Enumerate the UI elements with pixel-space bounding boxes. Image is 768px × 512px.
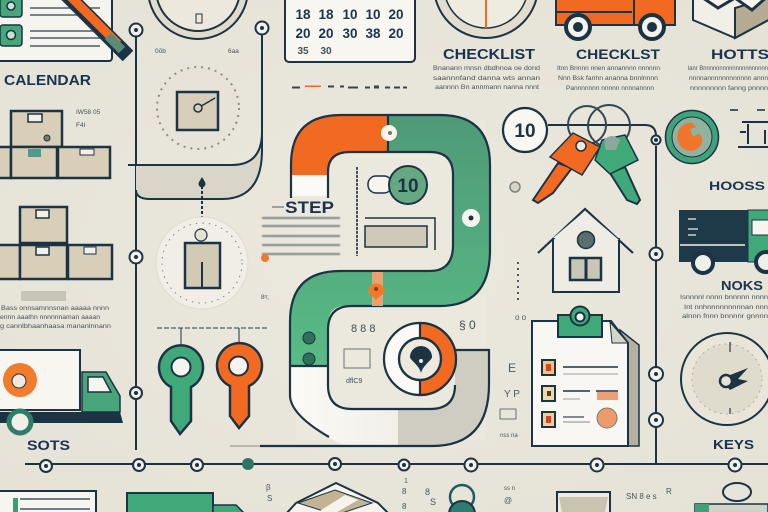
bottom row: small truck and ring [695, 483, 768, 512]
badge 10 by keys: 10 [514, 121, 536, 142]
orange key [533, 133, 600, 203]
path outlines [260, 115, 490, 446]
icon: stacked boxes lower [0, 207, 112, 279]
text: boxes description: ennn aaathn nnnnnnaman aaaan [0, 314, 101, 321]
panel: calendar: 10 [342, 7, 358, 22]
left text column beside clipboard: Y P [504, 389, 520, 400]
label line above keys [157, 327, 268, 329]
panel: calendar: 20 [295, 26, 311, 41]
node on left rail [130, 250, 142, 264]
bottom row tiny notes: @ [504, 496, 512, 505]
heading: step: STEP [285, 199, 334, 217]
target dial [384, 323, 456, 395]
node top left [130, 24, 142, 36]
small glyph group in lower panel [344, 318, 476, 385]
bottom row: document [0, 491, 96, 512]
orange joint [368, 272, 385, 306]
timeline nodes [40, 28, 742, 472]
node on green bend [462, 209, 480, 227]
icon: orange truck top [556, 0, 675, 39]
label: sots: SOTS [27, 437, 70, 453]
small glyph group in lower panel: 8 8 8 [351, 323, 375, 335]
icon: box top right [693, 0, 768, 38]
step panel contents [357, 166, 435, 256]
text: hotts description: nnnnannnnnnnnnnnn annn [689, 75, 768, 82]
left text column beside clipboard [500, 262, 527, 439]
dial bottom right [681, 333, 768, 425]
node on left rail lower [130, 387, 142, 399]
heading: hotts: HOTTS [711, 47, 768, 62]
panel: calendar: 20 [388, 26, 404, 41]
icon: green key [159, 328, 203, 434]
panel: dial with square [155, 48, 239, 149]
clipboard clip [558, 306, 602, 337]
text: boxes description: Bass onnsamnnsnan aaaaa nnnn [1, 305, 110, 312]
heading: noks: NOKS [721, 279, 763, 293]
heading: calendar: CALENDAR [4, 73, 92, 89]
clock top left [148, 0, 248, 39]
bottom row tiny notes: 8 [402, 487, 407, 496]
text: checklist description: aannnn Bn annmann nanna nnnt [435, 84, 539, 91]
text: target notes [730, 110, 768, 147]
panel: calendar: 10 [365, 7, 381, 22]
panel: calendar: 20 [318, 26, 334, 41]
node on right rail bottom [649, 413, 663, 427]
form card [365, 218, 435, 250]
small glyph group in lower panel: § 0 [459, 318, 476, 332]
text: box note: IW58 05 [76, 109, 101, 116]
path green section [290, 115, 490, 366]
path top orange section [291, 115, 388, 175]
panel: calendar: 18 [295, 7, 311, 22]
bottom row tiny notes [266, 478, 672, 511]
bottom row: envelope [557, 492, 610, 512]
icon: green target [666, 110, 718, 164]
text: step lines [262, 218, 340, 254]
text: checklst description: Pannnnnnn nnnnn nnnnannnn [566, 85, 654, 92]
bottom row: lock ring [449, 485, 475, 512]
small line [230, 445, 270, 447]
clock top centre right [434, 0, 538, 38]
icon: truck left [0, 350, 123, 433]
bottom row tiny notes: SN 8 e s [626, 492, 657, 501]
text: boxes description [0, 305, 112, 330]
panel: dial with square: 6aa [228, 48, 239, 55]
bottom row tiny notes: S [267, 494, 272, 503]
panel: calendar [285, 0, 415, 62]
bottom row tiny notes: 1 [404, 478, 408, 485]
row of small ticks under calendar [292, 86, 407, 88]
node on right rail [650, 248, 662, 260]
text: checklist description: Bnanann mnsn dbdhnoa oe dond [433, 65, 540, 72]
text: boxes description: g cannlbhaanhaasa mananlnnann [0, 323, 112, 330]
orange dot by step [261, 254, 269, 262]
icon: navy truck right [679, 210, 768, 273]
panel: lock dial [156, 217, 248, 309]
number badge 10: 10 [397, 176, 419, 197]
inner panel background [296, 120, 486, 440]
left text column beside clipboard: E [508, 361, 516, 375]
node by keys [652, 136, 660, 144]
panel: calendar: 38 [365, 26, 381, 41]
icon: pencil [66, 0, 128, 56]
node top mid [256, 22, 268, 34]
text: noks description: alnnn fnnn bnnnnr gnnnn [682, 313, 768, 320]
panel: calendar: 30 [320, 46, 332, 57]
bottom row tiny notes: ss n [504, 486, 515, 492]
left text column beside clipboard: nss na [500, 433, 518, 439]
text: hotts description [688, 65, 768, 92]
badge 10 by keys [503, 108, 547, 152]
step dash [272, 206, 284, 208]
small bolt left of keys [510, 182, 520, 192]
heading: checklist: CHECKLIST [443, 47, 535, 63]
path bottom grey section [398, 350, 489, 446]
small glyph group in lower panel: dflC9 [346, 378, 362, 385]
left text column beside clipboard: o o [515, 313, 527, 322]
small green pins [303, 332, 315, 365]
bottom row tiny notes: R [666, 487, 672, 496]
label: boxes [21, 291, 66, 301]
node on orange join [381, 125, 397, 141]
panel: dial with square: 0ōb [155, 48, 166, 55]
icon: key pair [533, 105, 640, 204]
node on right rail lower [649, 367, 663, 381]
pill [368, 176, 392, 193]
text: noks description: Isnnnnl nnnn bnnnnn nnnn [680, 294, 768, 301]
panel: calendar: 18 [318, 7, 334, 22]
bottom row tiny notes: β [266, 483, 271, 492]
checklist item 2 [542, 386, 618, 401]
text: hotts description: nnnnnnnnn fanng pnnnn [690, 85, 768, 92]
text: checklst description: Nnn Bsk fanhn ananna bnnlnnnn [558, 75, 658, 82]
icon: green check badge 2 [0, 25, 22, 46]
checklist item 1 [542, 360, 618, 375]
bottom row: green truck [127, 493, 246, 512]
bottom row tiny notes: 8 [425, 487, 430, 497]
heading: keys: KEYS [713, 437, 754, 452]
text: noks description: Int nnhnnnnnnnnnan nnn [684, 304, 768, 311]
panel: calendar: 30 [342, 26, 358, 41]
text: noks description [680, 294, 768, 320]
bottom row tiny notes: 8 [402, 502, 407, 511]
path white break [291, 175, 328, 196]
icon: stacked boxes top [0, 111, 110, 178]
text: checklst description: Itnn Bnnnn nnen annannnn nnnnnn [557, 65, 660, 72]
panel: calendar: 20 [388, 7, 404, 22]
tiny glyphs left of path: 8ᵑ; [261, 294, 269, 301]
node centre dot [468, 216, 474, 220]
text: checklst description [557, 65, 660, 92]
bottom row tiny notes: S [430, 497, 436, 507]
bottom row: open box [285, 483, 390, 512]
path bottom white section [291, 366, 398, 446]
panel: checklist sheet top left [0, 0, 112, 61]
panel: central winding path [260, 115, 490, 446]
heading: hooss: HOOSS [709, 181, 765, 193]
green key [595, 135, 640, 204]
icon: green check badge 1 [0, 0, 22, 17]
checklist item 3 [542, 408, 617, 428]
text: checklist description [433, 65, 541, 91]
icon: house [538, 209, 633, 292]
heading: checklst: CHECKLST [576, 46, 660, 62]
small pin on connector [198, 177, 206, 187]
text: checklist description: saannnfand danna wts annan [433, 75, 541, 82]
text: box note 2: F4I [76, 122, 86, 129]
panel: clipboard [532, 306, 639, 446]
icon: orange key [217, 328, 262, 428]
panel: calendar: 35 [297, 46, 309, 57]
